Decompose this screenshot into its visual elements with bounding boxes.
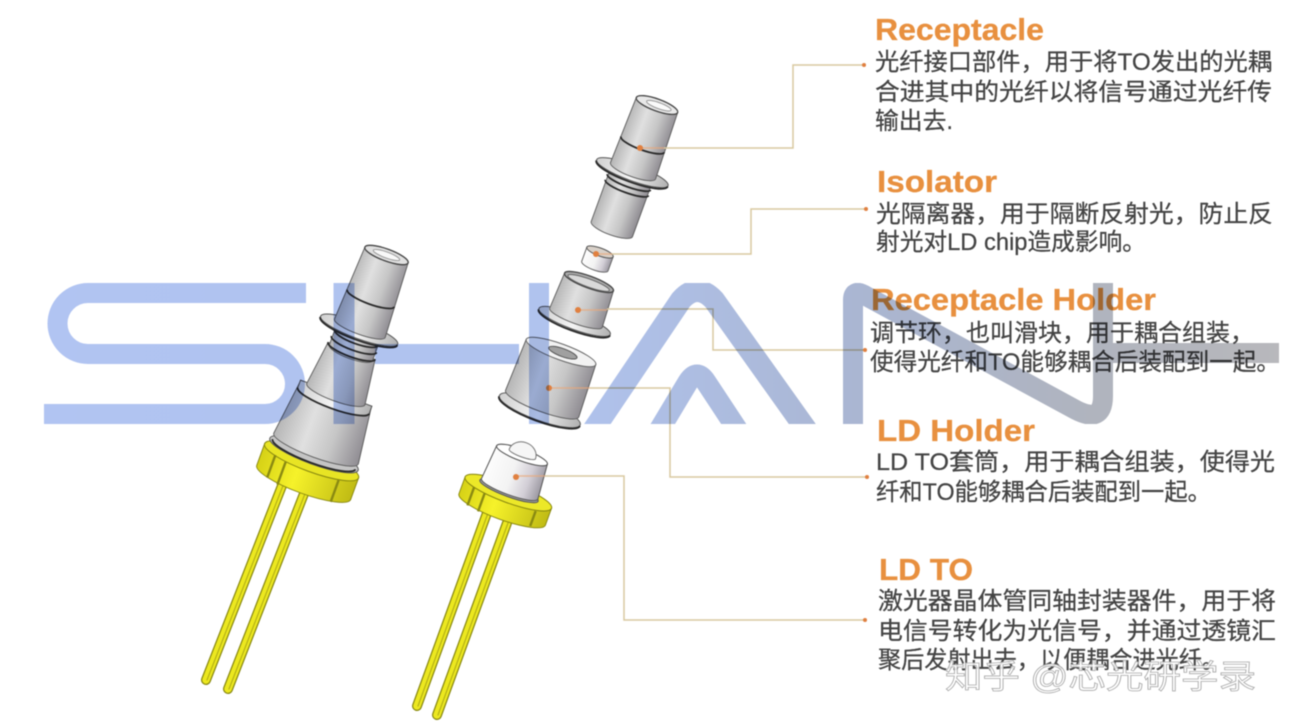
description: LD TO: 激光器晶体管同轴封装器件，用于将	[878, 588, 1276, 615]
description: Receptacle: 光纤接口部件，用于将TO发出的光耦	[875, 49, 1272, 76]
heading: Receptacle Holder: Receptacle Holder	[871, 282, 1156, 317]
part-side orange leader segments	[516, 148, 664, 476]
heading: LD Holder: LD Holder	[877, 413, 1035, 448]
assembled coaxial device	[206, 232, 436, 689]
description: Receptacle: 合进其中的光纤以将信号通过光纤传	[875, 79, 1272, 106]
anchor dots	[513, 63, 869, 622]
description: Receptacle	[875, 49, 1272, 135]
description: LD TO: 电信号转化为光信号，并通过透镜汇	[878, 618, 1276, 645]
description: Receptacle Holder: 使得光纤和TO能够耦合后装配到一起。	[870, 349, 1280, 376]
leader: LD TO	[545, 476, 866, 620]
leader: Receptacle Holder	[607, 309, 866, 350]
part: isolator	[580, 243, 615, 275]
description: LD Holder: LD TO套筒，用于耦合组装，使得光	[876, 449, 1275, 476]
description: Receptacle Holder	[870, 320, 1280, 376]
callout: LD Holder	[876, 413, 1275, 506]
description: LD Holder: 纤和TO能够耦合后装配到一起。	[876, 479, 1211, 506]
callout: Receptacle Holder	[870, 282, 1280, 376]
part: receptacle holder	[536, 263, 627, 343]
callout: Receptacle	[875, 12, 1272, 135]
exploded view	[417, 86, 695, 715]
large background watermark lettering	[44, 283, 1279, 432]
source watermark: 知乎 @芯光研学录	[945, 658, 1256, 695]
description: Isolator	[876, 201, 1273, 256]
description: Isolator: 光隔离器，用于隔断反射光，防止反	[876, 201, 1273, 228]
part: LD TO pins	[417, 513, 508, 715]
callout: LD TO	[878, 552, 1276, 674]
description: Isolator: 射光对LD chip造成影响。	[876, 229, 1146, 256]
part: receptacle	[574, 86, 695, 248]
callout: Isolator	[876, 164, 1273, 256]
leader: LD Holder	[590, 388, 868, 477]
heading: LD TO: LD TO	[879, 552, 973, 587]
leader: Receptacle	[664, 65, 865, 148]
leader lines	[513, 63, 869, 622]
heading: Isolator: Isolator	[877, 164, 997, 199]
leader: Isolator	[612, 209, 866, 254]
description: Receptacle Holder: 调节环，也叫滑块，用于耦合组装，	[870, 320, 1254, 347]
description: LD TO	[878, 588, 1276, 674]
description: LD TO: 聚后发射出去，以便耦合进光纤。	[878, 647, 1225, 674]
assembled device body	[253, 232, 436, 510]
heading: Receptacle: Receptacle	[875, 12, 1044, 47]
description: LD Holder	[876, 449, 1275, 506]
description: Receptacle: 输出去.	[875, 108, 953, 135]
part: LD TO	[456, 427, 570, 535]
part: LD holder	[496, 330, 604, 435]
assembled device pins	[206, 478, 308, 689]
